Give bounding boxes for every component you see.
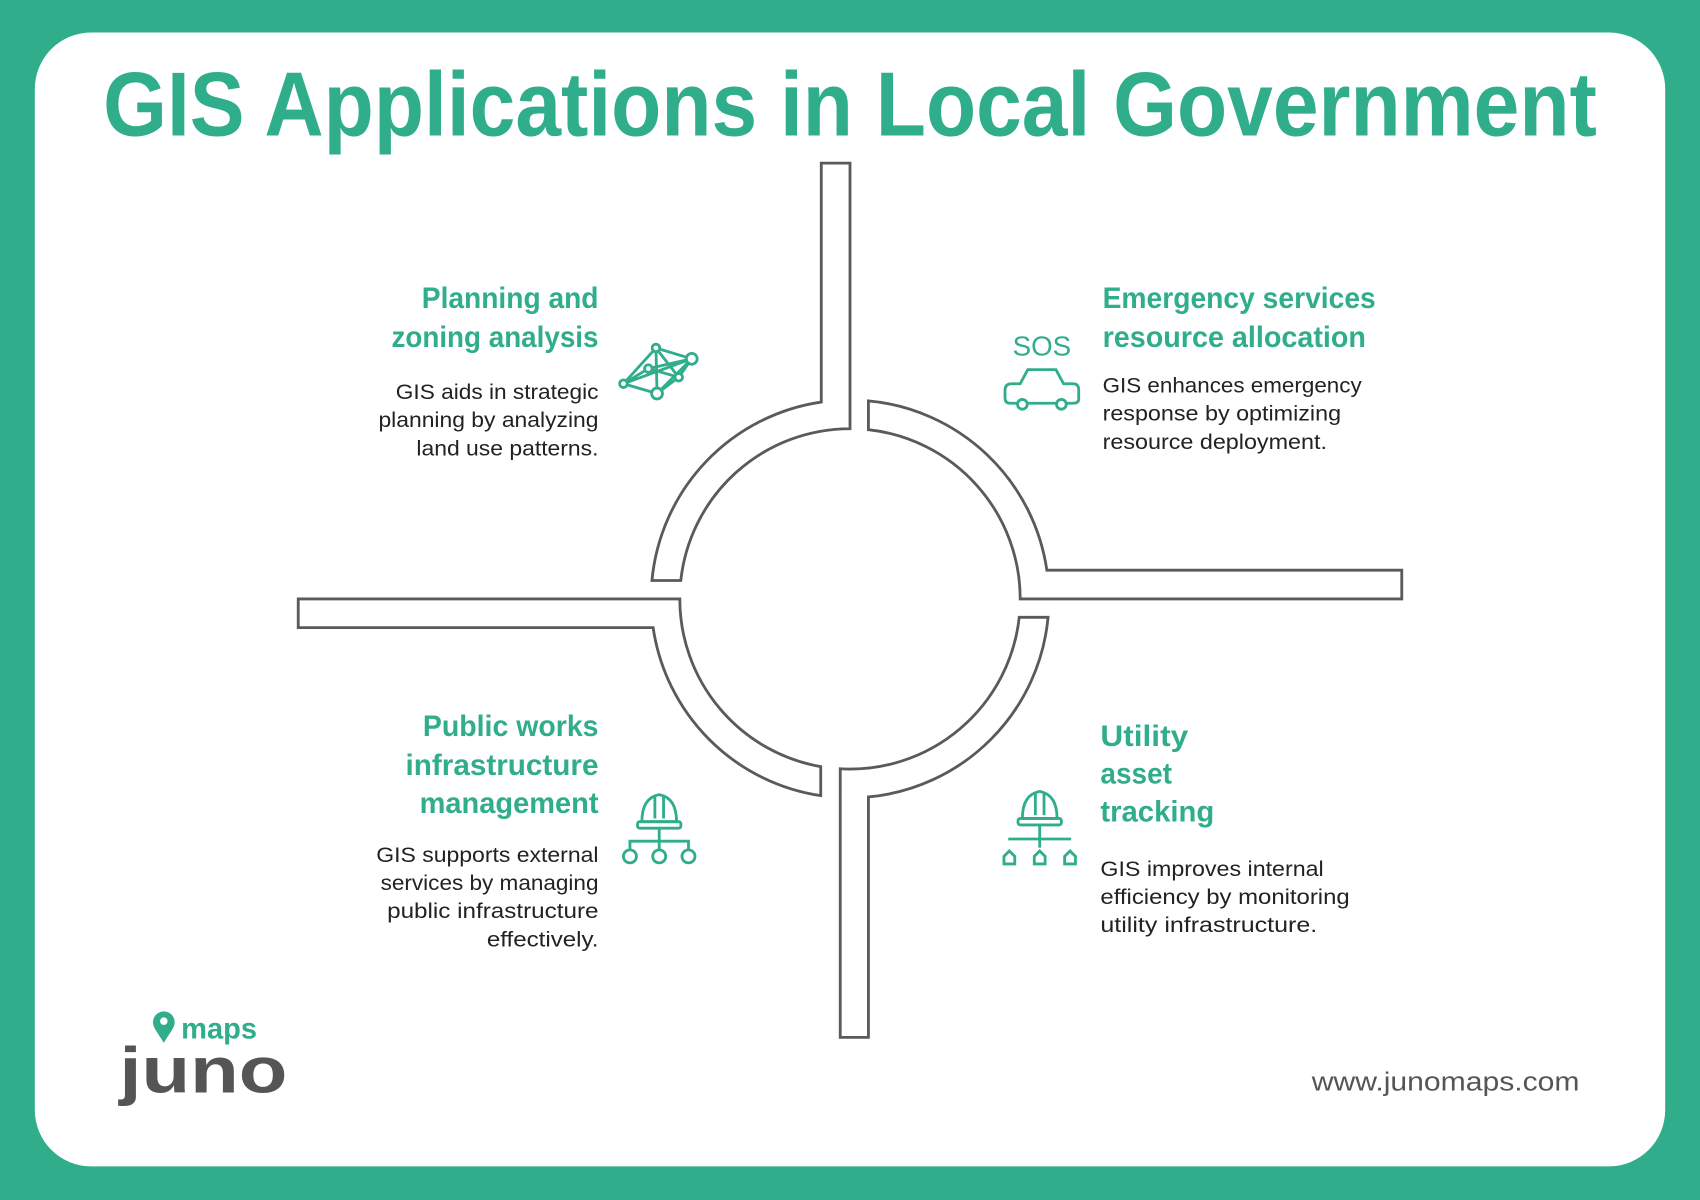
panel: planning and zoning: land use patterns. xyxy=(416,435,599,460)
panel: utility asset tracking: tracking xyxy=(1100,797,1214,829)
panel: utility asset tracking: Utility xyxy=(1100,721,1189,753)
panel: public works: GIS supports external xyxy=(376,842,599,867)
panel: planning and zoning: GIS aids in strategic xyxy=(396,379,599,404)
panel: public works: management xyxy=(420,788,599,820)
panel: public works xyxy=(376,711,599,951)
panel: planning and zoning xyxy=(378,283,599,460)
panel: utility asset tracking: utility infrastructure. xyxy=(1100,912,1317,937)
panel: utility asset tracking: efficiency by monitoring xyxy=(1100,884,1350,909)
icon: SOS car: SOS xyxy=(1013,330,1071,362)
panel: public works: public infrastructure xyxy=(387,898,599,923)
panel: public works: services by managing xyxy=(381,870,599,895)
panel: emergency services: Emergency services xyxy=(1103,283,1376,315)
panel: public works: effectively. xyxy=(487,926,599,951)
panel: planning and zoning: zoning analysis xyxy=(391,322,599,354)
icon: SOS car xyxy=(1005,330,1079,409)
panel: emergency services: resource allocation xyxy=(1103,322,1366,354)
footer url: www.junomaps.com xyxy=(1311,1067,1580,1097)
panel: emergency services: resource deployment. xyxy=(1103,429,1327,454)
panel: public works: Public works xyxy=(423,711,599,743)
icon: network xyxy=(620,344,697,399)
panel: planning and zoning: Planning and xyxy=(422,283,599,315)
logo: juno maps: maps xyxy=(181,1013,257,1045)
icon: helmet hierarchy (utility) xyxy=(1004,791,1075,864)
panel: emergency services: GIS enhances emergency xyxy=(1103,372,1362,397)
panel: utility asset tracking: GIS improves internal xyxy=(1100,856,1324,881)
roundabout diagram xyxy=(298,163,1402,1037)
panel: planning and zoning: planning by analyzing xyxy=(378,407,599,432)
panel: emergency services xyxy=(1103,283,1376,454)
panel: emergency services: response by optimizing xyxy=(1103,401,1341,426)
panel: utility asset tracking xyxy=(1100,721,1350,937)
logo: juno maps xyxy=(117,1011,287,1107)
panel: public works: infrastructure xyxy=(406,750,599,782)
icon: helmet hierarchy (public works) xyxy=(623,795,695,863)
logo: juno maps: juno xyxy=(117,1034,287,1107)
panel: utility asset tracking: asset xyxy=(1100,759,1172,791)
